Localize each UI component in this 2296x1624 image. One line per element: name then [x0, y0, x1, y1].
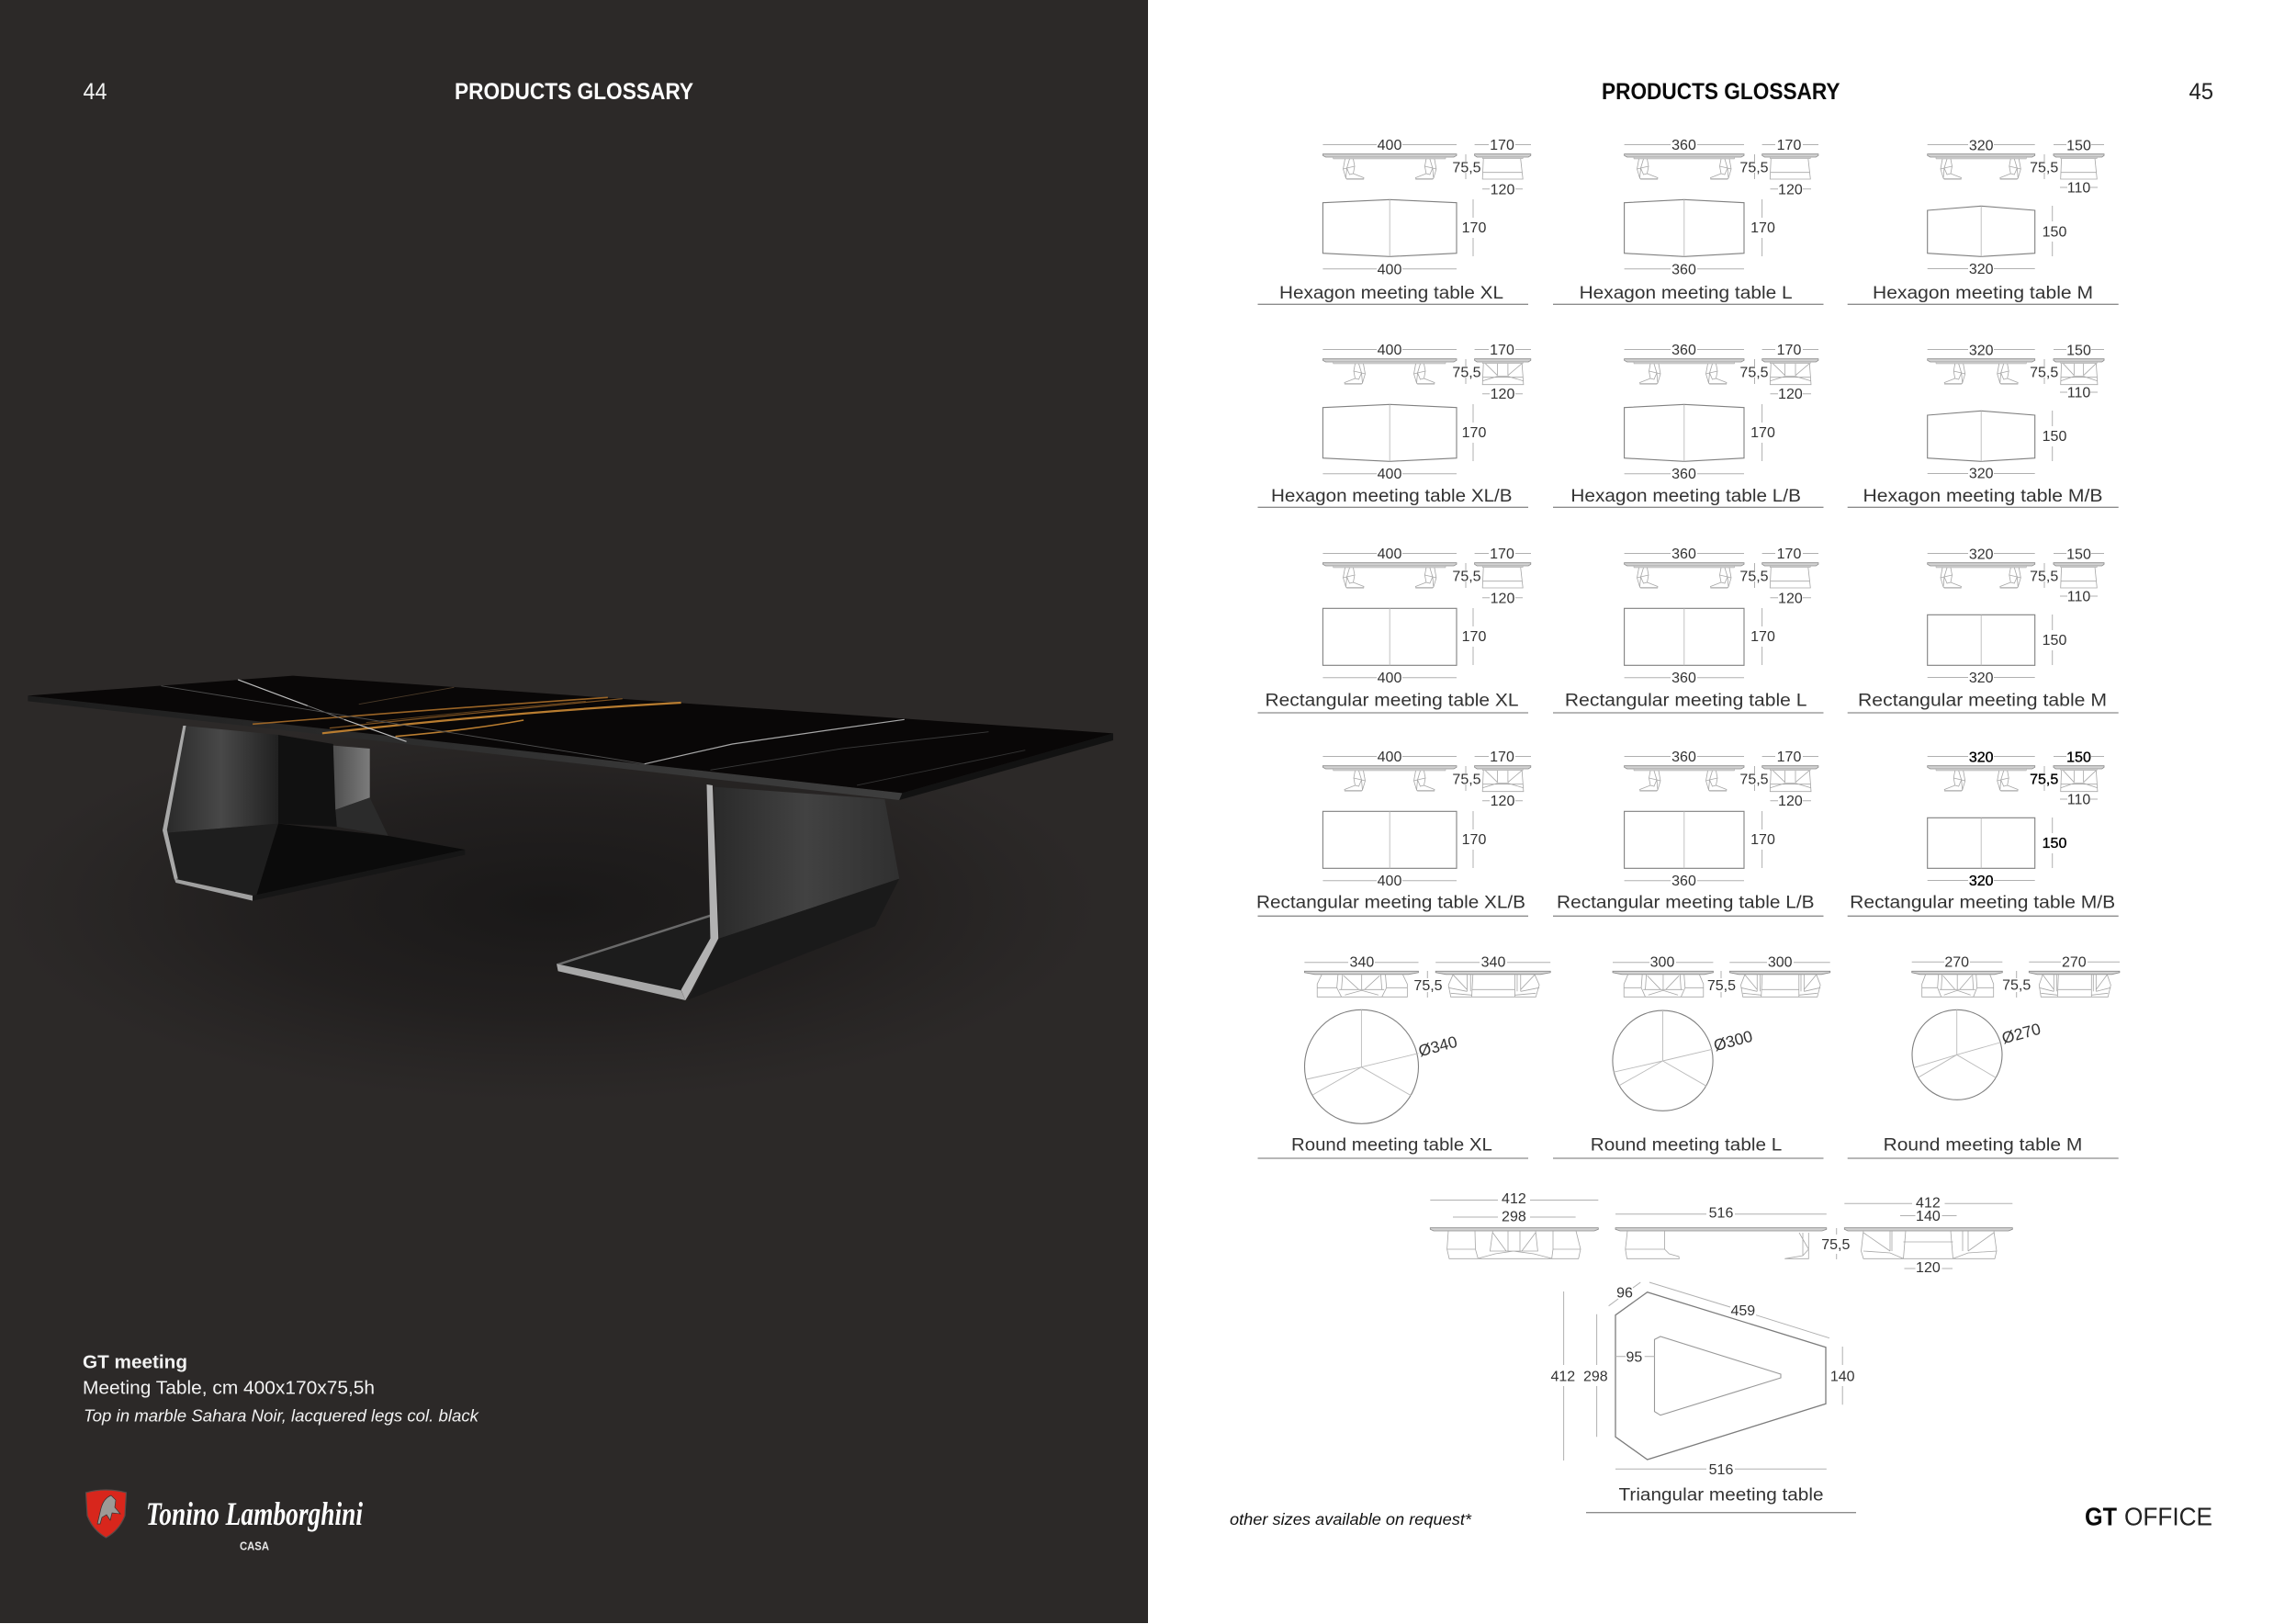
drawings and dimensions: 320 — [1969, 874, 1994, 889]
drawings and dimensions: 120 — [1778, 182, 1803, 198]
drawings and dimensions: 170 — [1777, 547, 1801, 562]
drawings and dimensions: 320 — [1969, 671, 1994, 686]
drawings and dimensions: 120 — [1778, 387, 1803, 402]
drawings and dimensions: 170 — [1462, 425, 1486, 441]
drawings and dimensions: 360 — [1671, 138, 1696, 153]
drawings and dimensions: 320 — [1969, 547, 1994, 562]
page number 44: 44 — [83, 79, 107, 105]
panel: left dark page — [0, 0, 1148, 1623]
logo: Tonino Lamborghini Casa: CASA — [240, 1539, 269, 1552]
drawings and dimensions: 170 — [1490, 343, 1514, 358]
drawings and dimensions — [1322, 750, 1531, 889]
floor shadow — [0, 707, 1102, 1102]
elevations: 270 — [2062, 955, 2087, 970]
drawings and dimensions: 400 — [1378, 671, 1401, 686]
plan view: 96 — [1616, 1286, 1633, 1301]
drawings and dimensions: 360 — [1671, 343, 1696, 358]
drawings and dimensions: 75,5 — [2030, 570, 2058, 584]
elevations: 75,5 — [1707, 978, 1736, 994]
drawings and dimensions: 110 — [2067, 590, 2090, 605]
left elevation: 298 — [1502, 1209, 1526, 1225]
table name: Round meeting table M — [1884, 1135, 2082, 1155]
drawings and dimensions: 75,5 — [1739, 570, 1769, 584]
drawings and dimensions: 400 — [1378, 138, 1401, 153]
drawings and dimensions — [1928, 344, 2104, 481]
back leg — [163, 726, 465, 901]
drawings and dimensions: 75,5 — [1452, 570, 1481, 584]
plan view: Ø270 — [2000, 1020, 2043, 1047]
drawings and dimensions — [1625, 343, 1818, 482]
drawings and dimensions: 360 — [1671, 547, 1696, 562]
cell: Round meeting table M — [1848, 955, 2120, 1158]
drawings and dimensions: 150 — [2043, 429, 2066, 445]
middle elevation — [1615, 1205, 1827, 1258]
logo: Tonino Lamborghini Casa — [86, 1490, 363, 1552]
drawings and dimensions — [1625, 138, 1818, 277]
drawings and dimensions: 170 — [1462, 629, 1486, 645]
drawings and dimensions — [1322, 138, 1531, 277]
logo: Tonino Lamborghini Casa: Tonino Lamborghini — [146, 1495, 363, 1532]
table name: Round meeting table XL — [1291, 1135, 1492, 1155]
heading: products glossary left: PRODUCTS GLOSSARY — [455, 79, 693, 105]
plan view — [1613, 1010, 1755, 1111]
product caption: Top in marble Sahara Noir, lacquered legs col. black — [84, 1405, 480, 1425]
elevations: 300 — [1650, 955, 1674, 970]
drawings and dimensions — [1928, 138, 2104, 277]
drawings and dimensions: 75,5 — [1452, 160, 1481, 176]
cell: Round meeting table L — [1553, 955, 1830, 1158]
drawings and dimensions: 360 — [1671, 263, 1696, 277]
elevations: 340 — [1350, 955, 1374, 970]
drawings and dimensions: 400 — [1378, 467, 1401, 482]
drawings and dimensions — [1322, 547, 1531, 686]
elevations — [1912, 955, 2120, 998]
drawings and dimensions: 320 — [1969, 138, 1994, 154]
middle elevation: 516 — [1709, 1205, 1733, 1222]
plan view — [1550, 1282, 1855, 1478]
drawings and dimensions: 120 — [1491, 592, 1514, 606]
table name: Rectangular meeting table M — [1858, 691, 2107, 711]
drawings and dimensions: 170 — [1777, 138, 1801, 153]
front leg — [557, 784, 899, 1000]
plan view: Ø340 — [1416, 1032, 1459, 1060]
drawings and dimensions: 75,5 — [1452, 772, 1481, 788]
drawings and dimensions: 150 — [2043, 836, 2066, 851]
plan view — [1304, 1009, 1459, 1123]
table name: Hexagon meeting table M — [1873, 284, 2093, 303]
table name: Hexagon meeting table L/B — [1570, 487, 1801, 506]
drawings and dimensions: 120 — [1491, 387, 1514, 402]
drawings and dimensions: 360 — [1671, 467, 1696, 482]
cell: Hexagon meeting table XL/B — [1258, 343, 1531, 507]
drawings and dimensions: 150 — [2043, 224, 2066, 241]
collection name: GT OFFICE: OFFICE — [2124, 1503, 2212, 1531]
cell: Hexagon meeting table L — [1553, 138, 1824, 304]
drawings and dimensions: 170 — [1750, 629, 1775, 645]
elevations: 270 — [1944, 955, 1969, 970]
cell: Rectangular meeting table M — [1848, 547, 2119, 713]
drawings and dimensions: 75,5 — [1739, 160, 1769, 176]
cell: Rectangular meeting table M/B — [1848, 750, 2119, 916]
drawings and dimensions: 150 — [2066, 138, 2091, 154]
table name: Hexagon meeting table L — [1580, 284, 1793, 303]
elevations: 75,5 — [2002, 977, 2031, 994]
elevations: 300 — [1768, 955, 1793, 970]
drawings and dimensions: 150 — [2066, 344, 2091, 358]
drawings and dimensions: 110 — [2067, 386, 2090, 401]
drawings and dimensions — [1625, 750, 1818, 889]
table name: Rectangular meeting table XL — [1266, 691, 1519, 711]
drawings and dimensions: 400 — [1378, 750, 1401, 765]
cell: Rectangular meeting table XL — [1258, 547, 1531, 713]
heading: products glossary right: PRODUCTS GLOSSARY — [1602, 79, 1840, 105]
plan view: 459 — [1730, 1303, 1755, 1319]
table name: Rectangular meeting table XL/B — [1256, 893, 1525, 913]
icon: bull shield — [86, 1490, 127, 1538]
drawings and dimensions: 150 — [2066, 750, 2091, 766]
table name: Hexagon meeting table M/B — [1863, 487, 2103, 506]
cell: Hexagon meeting table L/B — [1553, 343, 1824, 507]
drawings and dimensions: 75,5 — [1739, 366, 1769, 380]
product caption: Meeting Table, cm 400x170x75,5h — [83, 1378, 375, 1399]
right elevation — [1821, 1196, 2012, 1276]
cell: Hexagon meeting table XL — [1258, 138, 1531, 304]
plan view — [1912, 1009, 2043, 1100]
plan view: 412 — [1550, 1369, 1575, 1385]
product caption: GT meeting — [83, 1351, 187, 1372]
elevations: 340 — [1481, 955, 1505, 970]
plan view: 95 — [1626, 1350, 1642, 1365]
drawings and dimensions: 360 — [1671, 671, 1696, 686]
drawings and dimensions: 120 — [1778, 794, 1803, 809]
drawings and dimensions: 110 — [2067, 181, 2090, 197]
product photo: GT meeting table — [0, 676, 1113, 1102]
drawings and dimensions: 320 — [1969, 467, 1994, 481]
plan view: 298 — [1583, 1369, 1608, 1385]
table name: Hexagon meeting table XL — [1279, 284, 1503, 303]
product caption — [83, 1351, 480, 1425]
left elevation: 412 — [1502, 1191, 1526, 1207]
drawings and dimensions: 75,5 — [2030, 772, 2058, 788]
drawings and dimensions — [1928, 750, 2104, 889]
drawings and dimensions: 400 — [1378, 343, 1401, 358]
drawings and dimensions: 170 — [1462, 832, 1486, 848]
drawings and dimensions: 110 — [2067, 793, 2090, 808]
drawings and dimensions: 170 — [1750, 220, 1775, 236]
marble top — [28, 676, 1113, 800]
drawings and dimensions — [1928, 547, 2104, 686]
right elevation: 140 — [1916, 1209, 1941, 1224]
footnote: other sizes available on request* — [1230, 1510, 1472, 1528]
elevations — [1613, 955, 1830, 998]
table name: Hexagon meeting table XL/B — [1271, 487, 1513, 506]
drawings and dimensions: 170 — [1490, 547, 1514, 562]
drawings and dimensions: 170 — [1490, 750, 1514, 765]
page number 45: 45 — [2189, 79, 2213, 105]
drawings and dimensions: 75,5 — [2030, 160, 2058, 176]
drawings and dimensions: 75,5 — [1739, 772, 1769, 788]
drawings and dimensions — [1322, 343, 1531, 482]
drawings and dimensions: 170 — [1777, 750, 1801, 765]
cell: Hexagon meeting table M — [1848, 138, 2119, 304]
drawings and dimensions: 400 — [1378, 547, 1401, 562]
drawings and dimensions: 150 — [2043, 633, 2066, 648]
right elevation: 75,5 — [1821, 1237, 1850, 1253]
drawings and dimensions: 320 — [1969, 750, 1994, 766]
drawings and dimensions: 75,5 — [1452, 366, 1481, 380]
drawings and dimensions: 170 — [1750, 832, 1775, 848]
plan view: 516 — [1709, 1462, 1733, 1478]
left elevation — [1430, 1191, 1598, 1258]
drawings and dimensions: 120 — [1491, 182, 1514, 198]
table name: Rectangular meeting table L/B — [1557, 893, 1815, 913]
cell: Triangular meeting table — [1430, 1191, 2012, 1513]
drawings and dimensions: 320 — [1969, 344, 1994, 358]
table name: Triangular meeting table — [1618, 1485, 1824, 1505]
elevations — [1304, 955, 1550, 998]
collection name: GT OFFICE: GT — [2085, 1503, 2117, 1531]
table name: Round meeting table L — [1591, 1135, 1782, 1155]
drawings and dimensions: 400 — [1378, 874, 1401, 889]
cell: Rectangular meeting table L/B — [1553, 750, 1824, 916]
right elevation: 120 — [1916, 1260, 1941, 1276]
cell: Hexagon meeting table M/B — [1848, 344, 2119, 507]
drawings and dimensions: 75,5 — [2030, 366, 2058, 380]
table name: Rectangular meeting table L — [1565, 691, 1806, 711]
elevations: 75,5 — [1413, 978, 1443, 994]
collection name: GT OFFICE — [2085, 1503, 2212, 1531]
plan view: Ø300 — [1712, 1027, 1755, 1054]
drawings and dimensions: 400 — [1378, 263, 1401, 277]
drawings and dimensions: 170 — [1777, 343, 1801, 358]
plan view: 140 — [1830, 1369, 1855, 1385]
drawings and dimensions: 120 — [1491, 794, 1514, 809]
drawings and dimensions: 170 — [1462, 220, 1486, 236]
drawings and dimensions: 320 — [1969, 262, 1994, 277]
cell: Rectangular meeting table XL/B — [1256, 750, 1531, 916]
drawings and dimensions: 360 — [1671, 874, 1696, 889]
drawings and dimensions: 170 — [1490, 138, 1514, 153]
table name: Rectangular meeting table M/B — [1850, 893, 2115, 913]
drawings and dimensions: 170 — [1750, 425, 1775, 441]
drawings and dimensions: 360 — [1671, 750, 1696, 765]
drawings and dimensions: 120 — [1778, 592, 1803, 606]
cell: Round meeting table XL — [1258, 955, 1550, 1158]
right elevation: 412 — [1916, 1196, 1941, 1211]
drawings and dimensions: 150 — [2066, 547, 2091, 562]
cell: Rectangular meeting table L — [1553, 547, 1824, 713]
drawings and dimensions — [1625, 547, 1818, 686]
